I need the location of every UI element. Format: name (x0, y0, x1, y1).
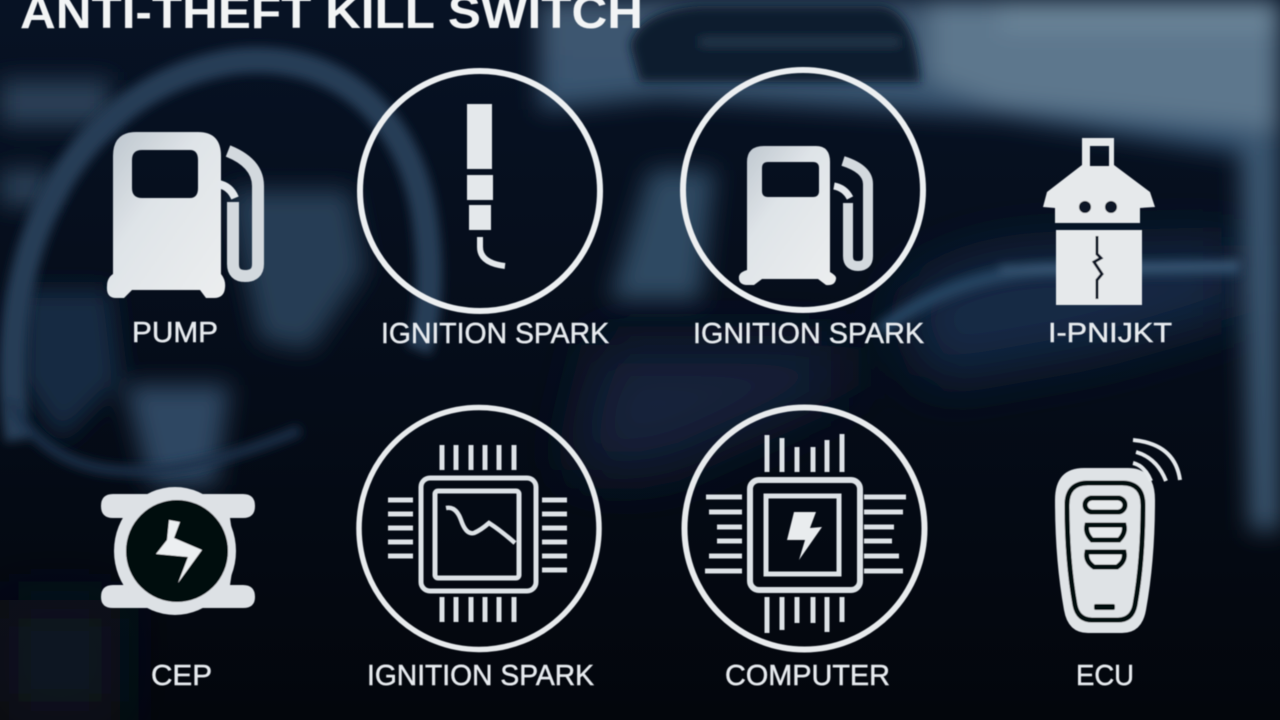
panel: ECU key fob (1055, 440, 1180, 692)
icon: house with crack (1043, 138, 1155, 305)
icon: chip with bolt (705, 434, 906, 633)
circle outline (684, 408, 924, 650)
icon: fuel pump in circle (739, 146, 868, 285)
panel: pump (107, 132, 258, 349)
circle outline (359, 408, 599, 650)
label: ignition spark: IGNITION SPARK (381, 318, 610, 350)
panel: ignition spark plug (360, 71, 610, 350)
icon: spark plug (467, 104, 505, 266)
label: ignition spark: IGNITION SPARK (693, 318, 925, 350)
label: garbled text: I-PNIJKT (1048, 317, 1172, 348)
icon: chip with graph (388, 445, 567, 622)
panel: immobilizer house (1043, 138, 1172, 348)
label: ECU: ECU (1076, 660, 1134, 692)
label: pump: PUMP (132, 317, 218, 349)
panel: ignition spark pump (683, 70, 925, 350)
panel: ignition spark chip (359, 408, 599, 692)
icon: fuel pump (107, 132, 258, 298)
circle outline (683, 70, 923, 310)
panel: computer (684, 408, 924, 692)
circle outline (360, 71, 600, 311)
label: ignition spark: IGNITION SPARK (367, 660, 595, 692)
icon: key fob (1055, 440, 1180, 633)
label: computer: COMPUTER (725, 660, 890, 692)
icon: bolt ring (101, 487, 255, 615)
label: CEP: CEP (151, 660, 212, 692)
panel: CEP (101, 487, 255, 692)
